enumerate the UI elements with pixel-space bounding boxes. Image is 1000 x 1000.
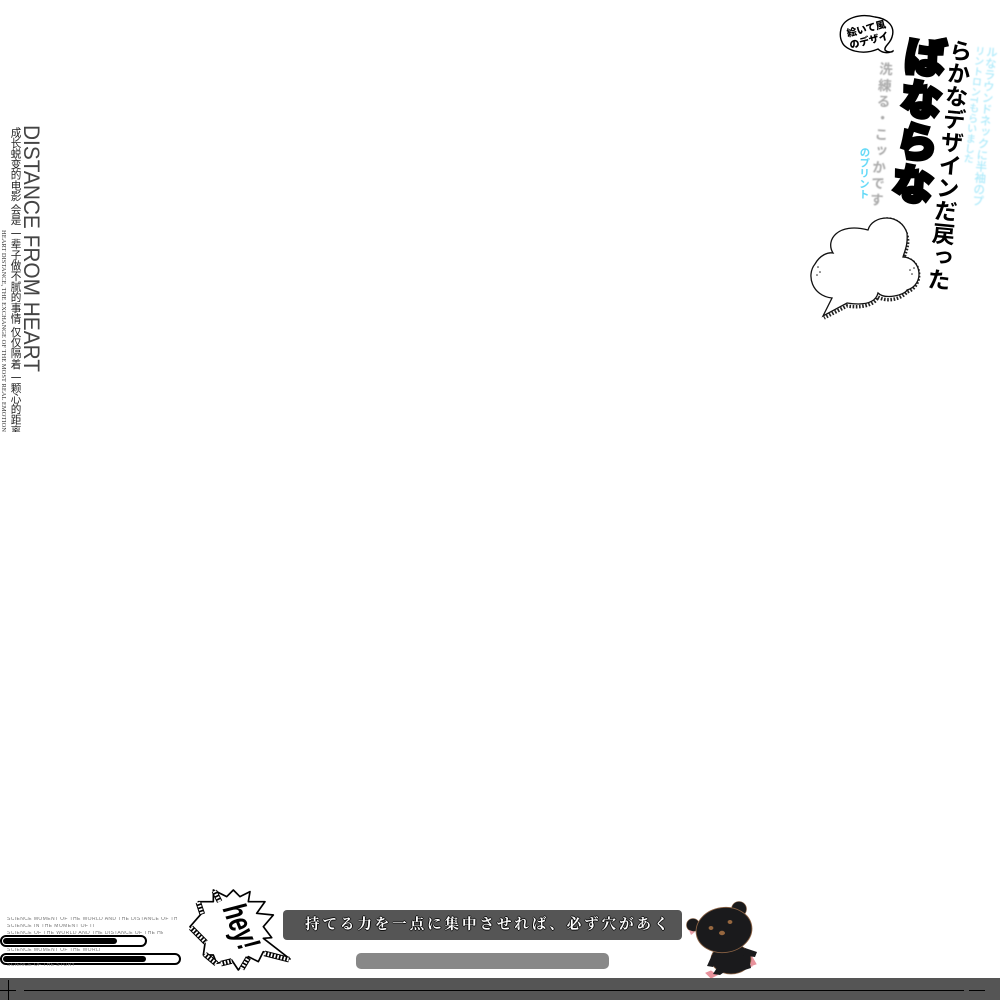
text: light blue copy line two: リントロンTもらいました (961, 45, 988, 165)
callout: small speech bubble (840, 14, 894, 54)
banner: proverb (283, 910, 682, 940)
text: grey shadowed copy: 洗練る・こッかです (866, 61, 896, 210)
heading: secondary black title: らかなデザインだ戻った (921, 37, 979, 293)
icon: plus mark (0, 980, 16, 1000)
text: Chinese tagline: 成长蜕变的电影 会是 一辈子做不腻的事情 仅仅隔着 一颗心的距离 (10, 127, 22, 432)
footer bar (0, 978, 1000, 1000)
footer rule (24, 990, 964, 991)
bar fill (3, 938, 117, 944)
text: bubble label: のデザイ (849, 31, 890, 52)
text: bubble label (846, 20, 890, 52)
bar: first progress bar (0, 935, 147, 947)
panel: vertical left copy (0, 125, 44, 432)
text: hey: hey! (215, 898, 267, 955)
text: English small print: HEART DISTANCE, THE EXCHANGE OF THE MOST REAL EMOTION (0, 230, 7, 432)
heading: Distance From Heart: DISTANCE FROM HEART (19, 125, 44, 372)
text: cyan copy: のプリント (857, 147, 872, 200)
icon: black bear (686, 901, 757, 978)
bar fill (3, 956, 146, 962)
panel: bottom left text and progress bars (0, 917, 181, 967)
bar: second progress bar (0, 953, 181, 965)
text: proverb line: 持てる力を一点に集中させれば、必ず穴があく (305, 917, 671, 933)
panel: top right title group (810, 14, 1000, 320)
text: bubble label: 絵いて風 (846, 20, 887, 40)
callout: large hand-drawn cloud bubble (810, 217, 920, 320)
bar: grey empty pill (356, 953, 609, 969)
text: light blue copy line one: ルなラウンドネックに半袖のプ (970, 45, 1000, 207)
footer rule short (969, 990, 985, 991)
icon: hey burst sticker (189, 889, 291, 971)
heading: heavy black title: ばならな (881, 33, 958, 208)
